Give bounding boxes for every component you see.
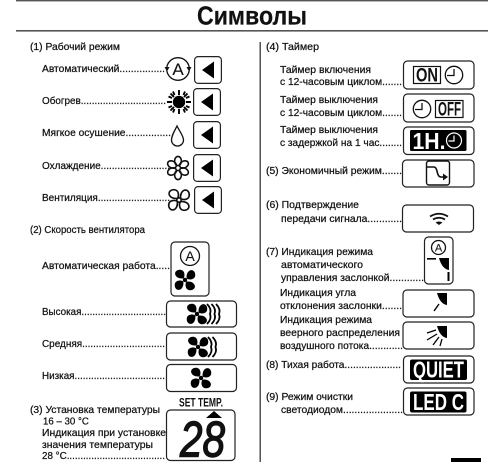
- row: auto fan: A: [185, 248, 195, 264]
- row: swing: веерного распределения: [280, 328, 400, 339]
- row: low: Низкая.................................: [42, 371, 165, 382]
- icon: signal: [402, 205, 474, 232]
- row: heating: [42, 89, 220, 115]
- row: on timer: ON: [416, 66, 438, 86]
- row: swing: воздушного потока............: [280, 341, 403, 352]
- row: 1h timer: 1H.: [412, 128, 446, 154]
- row: off timer: Таймер выключения: [280, 95, 378, 106]
- panel: set temperature: [30, 396, 235, 462]
- panel: fan speed: [30, 225, 236, 392]
- heading: timer: (4) Таймер: [266, 42, 319, 53]
- row: on timer: с 12-часовым циклом.......: [280, 77, 402, 88]
- row: 1h timer: с задержкой на 1 час........: [280, 138, 402, 149]
- column divider: [260, 42, 261, 462]
- row: louver angle: [280, 288, 474, 317]
- temperature text: [30, 405, 166, 462]
- row: off timer: OFF: [438, 100, 461, 120]
- row: auto fan: Автоматическая работа.....: [42, 261, 170, 272]
- row: auto louver: A: [435, 242, 443, 254]
- row: fan: [42, 187, 221, 213]
- row: auto louver: (7) Индикация режима: [266, 247, 374, 258]
- row: auto fan: [42, 242, 209, 296]
- temperature text: (3) Установка температуры: [30, 405, 160, 416]
- row: high: [42, 301, 236, 327]
- row: auto louver: автоматического: [281, 260, 363, 271]
- panel: quiet: [266, 356, 474, 383]
- row: on timer: Таймер включения: [280, 65, 371, 76]
- row: 1h timer: [280, 125, 474, 154]
- row: auto louver: управления заслонкой............: [281, 273, 424, 284]
- row: swing: Индикация режима: [280, 315, 373, 326]
- header rules: [16, 0, 488, 32]
- row: automatic: Автоматический................: [42, 64, 165, 75]
- panel: signal confirmation: передачи сигнала............: [281, 214, 402, 225]
- row: automatic: A: [172, 60, 184, 79]
- temperature text: 28 °C....................................: [42, 451, 165, 462]
- panel: operating mode: [30, 42, 221, 213]
- row: dry: Мягкое осушение................: [42, 128, 171, 139]
- row: louver angle: отклонения заслонки.......: [280, 301, 402, 312]
- heading: fan speed: (2) Скорость вентилятора: [30, 225, 146, 236]
- row: cooling: [42, 155, 220, 181]
- row: high: Высокая...............................: [42, 307, 166, 318]
- temperature text: значения температуры: [42, 440, 153, 451]
- temperature text: Индикация при установке: [42, 428, 166, 439]
- row: auto louver: [266, 237, 453, 284]
- panel: led clean: светодиодом.....................: [281, 405, 403, 416]
- panel: signal confirmation: [266, 200, 474, 232]
- title: Символы: [197, 0, 307, 30]
- row: heating: Обогрев...............................: [42, 96, 166, 107]
- row: swing: [280, 315, 474, 352]
- heading: operating mode: (1) Рабочий режим: [30, 42, 120, 53]
- row: dry: [42, 122, 220, 148]
- row: low: [42, 364, 236, 392]
- temperature display: [166, 410, 235, 462]
- row: 1h timer: Таймер выключения: [280, 125, 378, 136]
- icon: economy: [402, 160, 474, 187]
- panel: led clean: (9) Режим очистки: [266, 392, 353, 403]
- panel: economy mode: [266, 160, 474, 187]
- row: off timer: [280, 94, 474, 122]
- set temp label: SET TEMP.: [179, 396, 223, 410]
- row: medium: [42, 333, 236, 360]
- row: on timer: [280, 61, 474, 89]
- row: off timer: с 12-часовым циклом.......: [280, 108, 402, 119]
- row: louver angle: Индикация угла: [280, 288, 357, 299]
- temperature text: 16 – 30 °C: [43, 416, 89, 428]
- panel: quiet: (8) Тихая работа....................: [266, 360, 401, 371]
- row: fan: Вентиляция..........................: [42, 193, 170, 204]
- icon: led c: LED C: [413, 389, 464, 415]
- panel: led clean: [266, 388, 474, 416]
- panel: economy mode: (5) Экономичный режим.......: [266, 166, 402, 177]
- page footer mark: [451, 458, 481, 462]
- panel: louver indication: [266, 237, 474, 352]
- row: cooling: Охлаждение.........................: [42, 161, 170, 172]
- row: automatic: [42, 57, 221, 83]
- panel: timer: [266, 42, 474, 154]
- icon: quiet: QUIET: [413, 356, 464, 382]
- row: medium: Средняя..............................: [42, 339, 165, 350]
- panel: signal confirmation: (6) Подтверждение: [266, 200, 359, 211]
